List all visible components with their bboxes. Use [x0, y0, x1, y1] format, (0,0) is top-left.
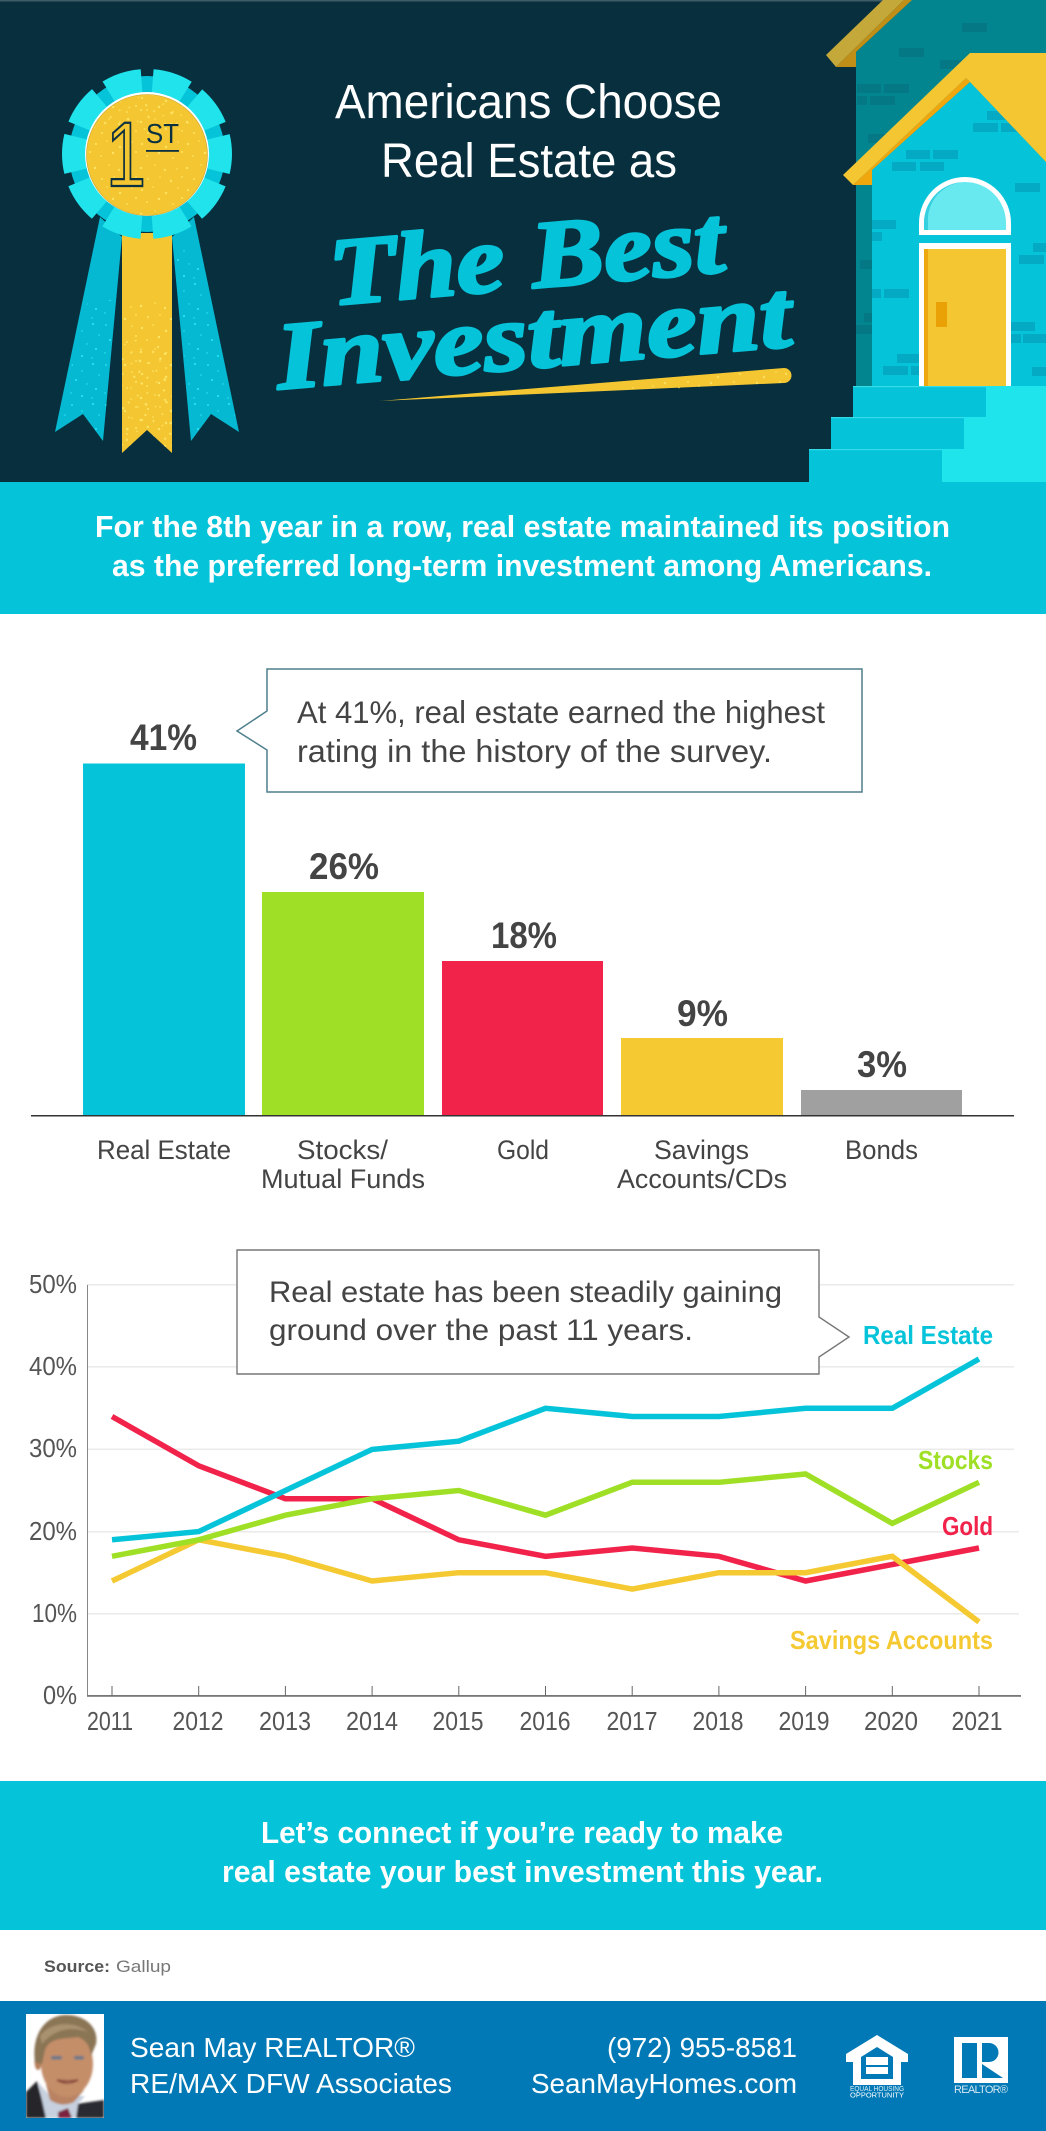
arched window — [919, 177, 1011, 235]
bar: bonds 3% — [801, 1043, 962, 1165]
bar: bonds 3%: Bonds — [845, 1135, 918, 1165]
x axis labels: 2016 — [520, 1706, 570, 1736]
bar: gold 18% — [442, 914, 603, 1165]
intro band — [0, 482, 1046, 614]
source note: Source: — [44, 1957, 110, 1976]
agent contact: SeanMayHomes.com — [531, 2068, 797, 2099]
intro text: For the 8th year in a row, real estate maintained its position — [95, 510, 950, 544]
line: gold — [112, 1416, 979, 1581]
agent name: RE/MAX DFW Associates — [130, 2068, 452, 2099]
agent contact — [531, 2032, 797, 2099]
x axis labels: 2019 — [778, 1706, 830, 1736]
x axis labels: 2012 — [172, 1706, 224, 1736]
x axis labels: 2015 — [432, 1706, 484, 1736]
line: savings accounts — [112, 1540, 979, 1622]
call to action band — [0, 1781, 1046, 1930]
callout: highest rating — [237, 669, 862, 792]
call to action text: Let’s connect if you’re ready to make — [261, 1816, 783, 1850]
agent portrait — [26, 2014, 104, 2118]
callout: highest rating: rating in the history of the survey. — [297, 733, 772, 769]
callout: steadily gaining ground: Real estate has been steadily gaining — [269, 1276, 782, 1309]
front wall — [872, 82, 1046, 386]
bar: real estate 41%: 41% — [130, 716, 197, 758]
footer panel — [0, 2001, 1046, 2131]
intro text: as the preferred long-term investment among Americans. — [112, 549, 932, 583]
line chart — [29, 1269, 1021, 1736]
x axis labels: 2013 — [259, 1706, 311, 1736]
agent name — [130, 2032, 452, 2099]
y axis labels: 20% — [29, 1516, 77, 1546]
series labels: Savings Accounts — [790, 1625, 993, 1655]
bar: stocks 26%: 26% — [309, 845, 379, 887]
bar: real estate 41% — [83, 716, 245, 1165]
gridlines and axes — [87, 1284, 1021, 1697]
x axis labels: 2011 — [87, 1706, 133, 1736]
bar: stocks 26%: Mutual Funds — [261, 1164, 425, 1194]
front roof — [843, 53, 1046, 185]
source note — [44, 1957, 171, 1976]
icon: equal housing opportunity: EQUAL HOUSING — [850, 2084, 904, 2093]
title: the best investment: The Best — [325, 185, 732, 326]
agent contact: (972) 955-8581 — [607, 2032, 797, 2063]
x axis labels: 2017 — [606, 1706, 658, 1736]
y axis labels: 0% — [43, 1680, 77, 1710]
steps — [809, 386, 1046, 482]
callout: steadily gaining ground — [237, 1250, 849, 1374]
call to action text: real estate your best investment this year. — [222, 1855, 823, 1889]
bar: savings 9%: Accounts/CDs — [617, 1164, 787, 1194]
series labels: Real Estate — [863, 1320, 993, 1350]
bar: stocks 26% — [261, 845, 425, 1194]
back roof — [826, 0, 912, 67]
door — [919, 243, 1011, 386]
title underline swoosh — [379, 368, 792, 401]
line: stocks — [112, 1474, 979, 1556]
x axis labels — [87, 1706, 1002, 1736]
callout: steadily gaining ground: ground over the past 11 years. — [269, 1314, 693, 1347]
series labels: Gold — [942, 1511, 993, 1541]
bar: savings 9% — [617, 992, 787, 1194]
icon: house — [809, 0, 1046, 482]
title: americans choose real estate as: Americans Choose — [335, 76, 722, 129]
intro text — [95, 510, 950, 583]
x axis labels: 2014 — [346, 1706, 398, 1736]
icon: equal housing opportunity: OPPORTUNITY — [850, 2090, 904, 2100]
callout: highest rating: At 41%, real estate earned the highest — [297, 694, 825, 730]
bar: bonds 3%: 3% — [857, 1043, 907, 1085]
y axis labels — [29, 1269, 77, 1710]
call to action text — [222, 1816, 823, 1889]
1st label: 1 — [106, 104, 146, 206]
x axis labels: 2018 — [692, 1706, 744, 1736]
bar: savings 9%: Savings — [654, 1135, 749, 1165]
series labels: Stocks — [918, 1445, 993, 1475]
y axis labels: 30% — [29, 1433, 77, 1463]
bar: gold 18%: Gold — [497, 1135, 549, 1165]
bar: stocks 26%: Stocks/ — [297, 1135, 389, 1165]
bar: gold 18%: 18% — [491, 914, 557, 956]
icon: equal housing opportunity — [846, 2035, 908, 2100]
icon: first place ribbon — [55, 76, 239, 453]
y axis labels: 50% — [29, 1269, 77, 1299]
line: real estate — [112, 1359, 979, 1540]
title: the best investment: Investment — [271, 260, 799, 410]
y axis labels: 40% — [29, 1351, 77, 1381]
series labels — [790, 1320, 993, 1655]
title: americans choose real estate as: Real Estate as — [381, 135, 677, 188]
header panel — [0, 0, 1046, 482]
1st label: ST — [146, 118, 179, 149]
y axis labels: 10% — [32, 1598, 77, 1628]
title: americans choose real estate as — [335, 76, 722, 188]
icon: realtor logo — [954, 2037, 1008, 2096]
x axis labels: 2020 — [864, 1706, 918, 1736]
icon: realtor logo: REALTOR® — [954, 2084, 1008, 2096]
title: the best investment — [271, 185, 799, 410]
bar: savings 9%: 9% — [677, 992, 728, 1034]
bar: real estate 41%: Real Estate — [97, 1135, 231, 1165]
source note: Gallup — [116, 1957, 171, 1976]
x axis labels: 2021 — [952, 1706, 1002, 1736]
agent name: Sean May REALTOR® — [130, 2032, 415, 2063]
bar chart — [31, 716, 1014, 1194]
